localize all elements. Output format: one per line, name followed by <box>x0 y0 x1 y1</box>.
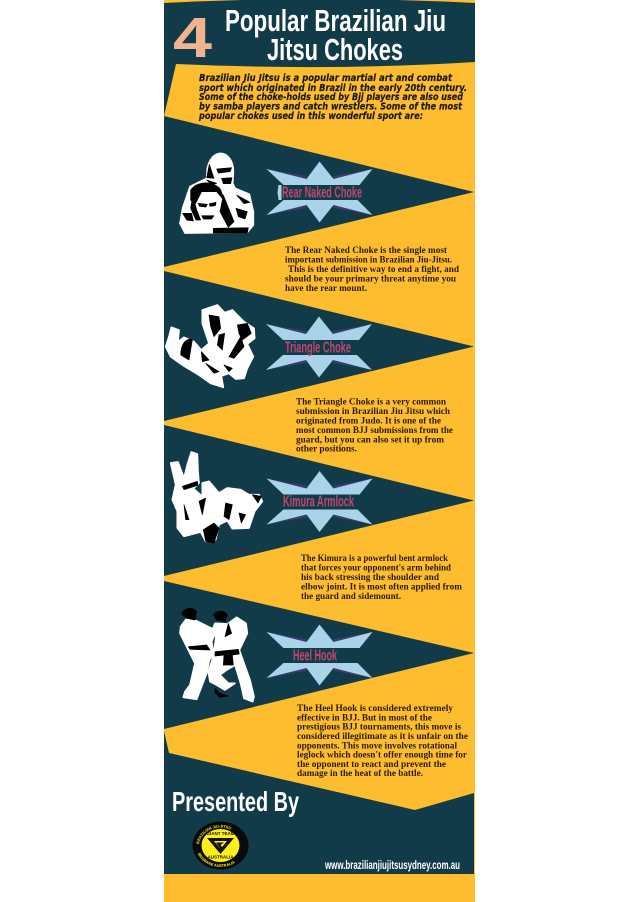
title: Popular Brazilian Jiu <box>225 3 446 38</box>
logo: BRAZILIAN JIU-JITSU <box>196 824 232 844</box>
title <box>225 3 446 67</box>
footer panel <box>164 731 474 874</box>
text: heel hook: prestigious BJJ tournaments, this move is <box>297 723 461 733</box>
text: rear naked choke: The Rear Naked Choke is the single most <box>285 246 448 256</box>
text: triangle choke <box>296 398 453 454</box>
figure: rear naked choke <box>180 153 253 233</box>
text: heel hook: The Heel Hook is considered extremely <box>297 704 453 714</box>
text: triangle choke: originated from Judo. It is one of the <box>296 416 441 426</box>
text: heel hook: leglock which doesn't offer enough time for <box>297 750 468 760</box>
text: triangle choke: submission in Brazilian Jiu Jitsu which <box>296 407 451 417</box>
pennant 3 <box>164 425 474 576</box>
text: triangle choke: most common BJJ submissions from the <box>296 426 453 436</box>
text: heel hook: damage in the heat of the battle. <box>297 769 423 779</box>
logo: BRISBANE AUSTRALIA <box>198 852 235 867</box>
header banner <box>164 0 475 116</box>
heading: presented by: Presented By <box>172 786 299 817</box>
star: heel hook <box>266 624 372 686</box>
text: kimura armlock: The Kimura is a powerful bent armlock <box>301 554 449 564</box>
intro text: by samba players and catch wrestlers. Some of the most <box>199 102 462 112</box>
text: kimura armlock <box>301 554 462 602</box>
intro text: Some of the choke-holds used by Bjj players are also used <box>199 92 463 103</box>
figure: heel hook <box>180 608 254 702</box>
intro text: Brazilian Jiu Jitsu is a popular martial art and combat <box>199 73 452 84</box>
star: kimura armlock <box>266 471 372 532</box>
intro text: sport which originated in Brazil in the early 20th century. <box>199 83 467 94</box>
pennant 2 <box>164 271 474 421</box>
intro text <box>198 73 467 122</box>
text: triangle choke: other positions. <box>296 444 357 454</box>
text: kimura armlock: that forces your opponent's arm behind <box>301 564 452 574</box>
text: rear naked choke <box>285 246 460 294</box>
figure: triangle choke <box>166 305 255 387</box>
label: heel hook: Heel Hook <box>293 648 337 664</box>
text: rear naked choke: should be your primary threat anytime you <box>285 274 457 284</box>
label: kimura armlock: Kimura Armlock <box>283 494 354 510</box>
text: triangle choke: guard, but you can also set it up from <box>296 436 444 446</box>
logo: GIANT TEAM <box>206 831 235 836</box>
logo: AUSTRALIA <box>208 854 234 860</box>
pennant 1 <box>164 116 474 267</box>
text: rear naked choke: have the rear mount. <box>285 284 367 294</box>
text: heel hook: opponents. This move involves rotational <box>297 741 457 751</box>
website url: www.brazilianjiujitsusydney.com.au <box>324 860 460 872</box>
text: heel hook: the opponent to react and prevent the <box>297 760 446 770</box>
intro text: popular chokes used in this wonderful sport are: <box>198 111 423 122</box>
star: rear naked choke <box>266 162 372 222</box>
text: kimura armlock: his back stressing the shoulder and <box>301 573 440 583</box>
pennant 4 <box>164 581 474 729</box>
logo <box>192 822 248 870</box>
star: triangle choke <box>266 316 372 378</box>
text: heel hook: effective in BJJ. But in most of the <box>297 713 432 723</box>
text: kimura armlock: the guard and sidemount. <box>301 592 401 602</box>
text: triangle choke: The Triangle Choke is a very common <box>296 398 447 408</box>
figure: kimura armlock <box>171 452 262 543</box>
text: rear naked choke: important submission in Brazilian Jiu-Jitsu. <box>285 256 452 266</box>
text: heel hook: considered illegitimate as it is unfair on the <box>297 732 468 742</box>
title: Jitsu Chokes <box>267 32 403 67</box>
label: rear naked choke: Rear Naked Choke <box>282 184 362 202</box>
title number: 4 <box>173 6 212 70</box>
label: triangle choke: Triangle Choke <box>285 340 351 356</box>
text: kimura armlock: elbow joint. It is most often applied from <box>301 582 462 592</box>
background panel <box>164 0 475 902</box>
text: heel hook <box>297 704 468 779</box>
text: rear naked choke: This is the definitive way to end a fight, and <box>288 265 460 275</box>
